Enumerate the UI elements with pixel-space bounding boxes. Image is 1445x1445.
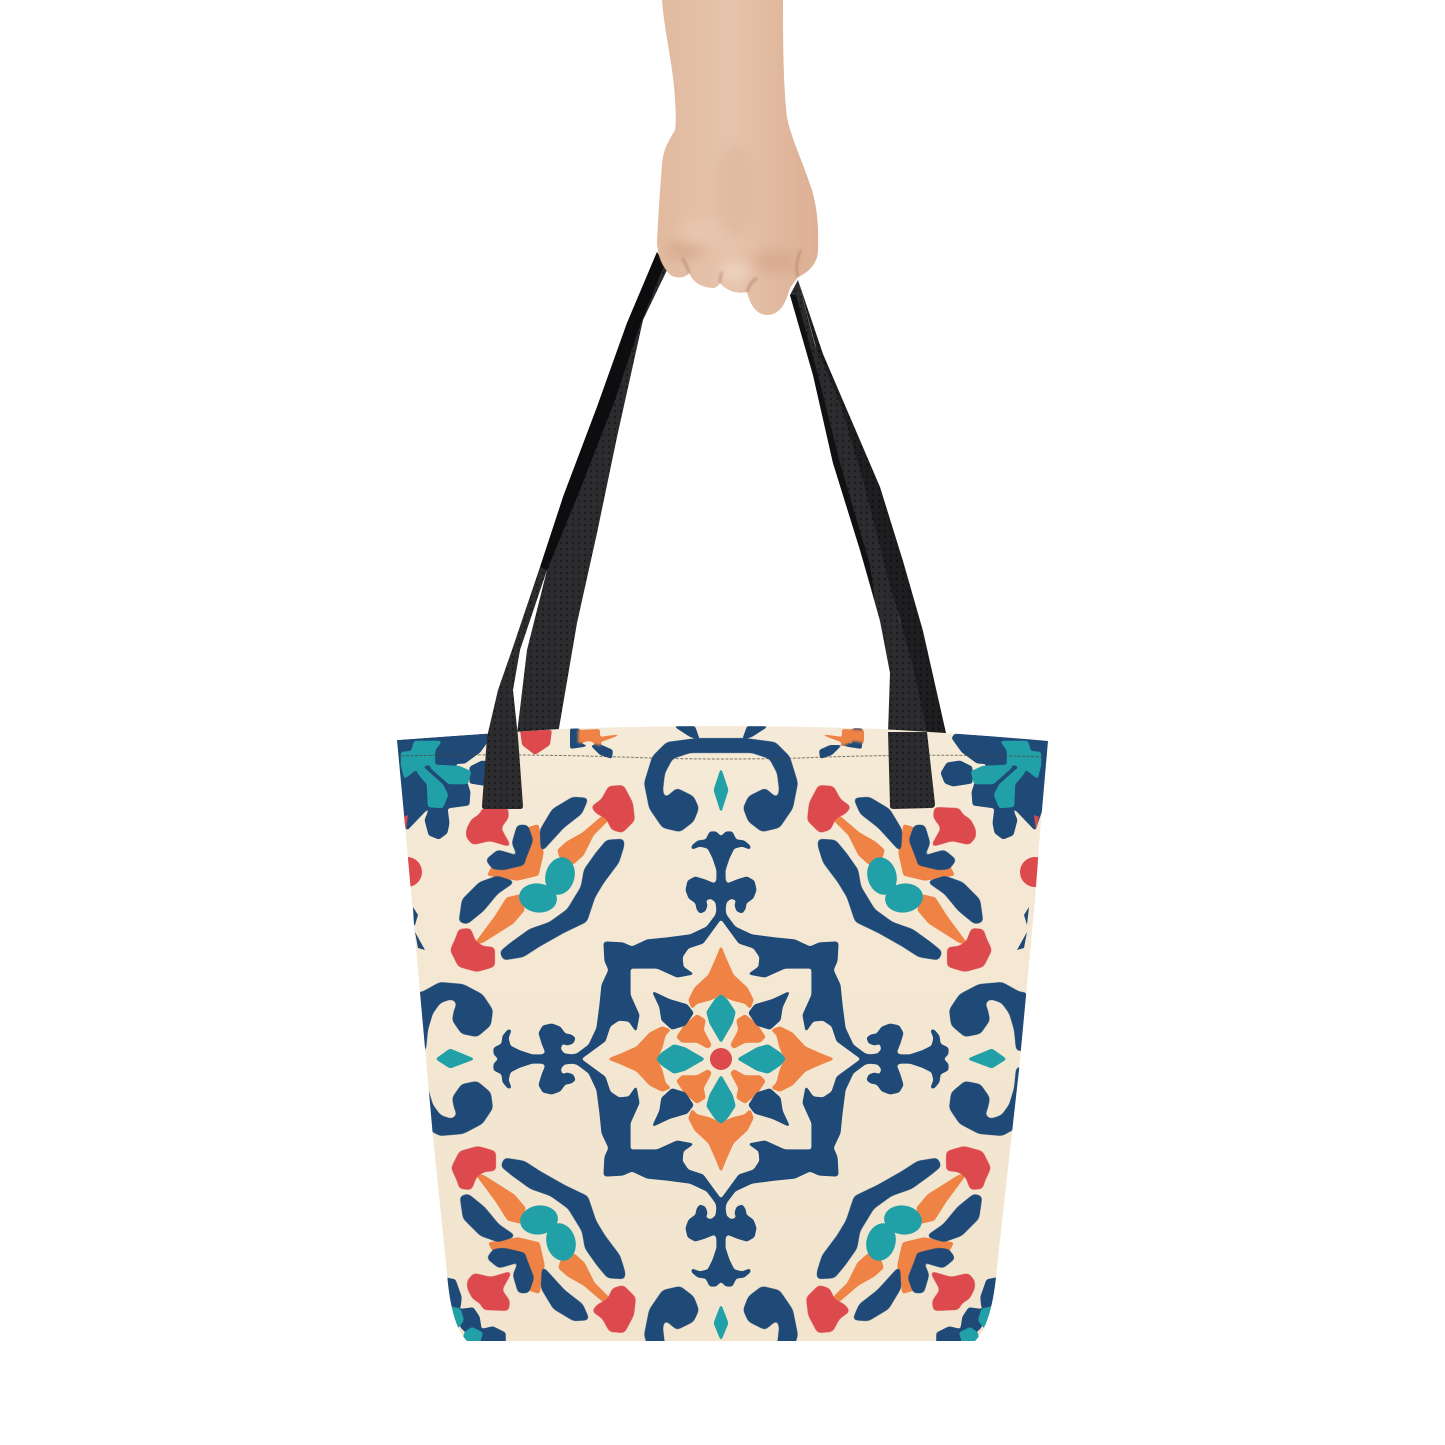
teal petals — [657, 995, 785, 1123]
bottom corner flower right — [937, 1278, 997, 1345]
right back strap — [798, 280, 946, 733]
hand and wrist — [657, 0, 818, 315]
central rosette — [609, 947, 833, 1171]
left strap dark fold — [540, 252, 663, 575]
orange large petals — [609, 947, 833, 1171]
left thin strap and patch — [482, 567, 547, 809]
corner motif top right — [808, 786, 991, 971]
finger creases — [682, 250, 801, 292]
knuckle highlights and shadows — [665, 145, 801, 292]
central navy star frame — [494, 832, 948, 1286]
bag body with printed pattern — [390, 720, 1055, 1379]
corner flower top right — [941, 734, 1050, 839]
orange small petals — [677, 1015, 765, 1103]
scroll pairs — [416, 739, 1026, 1379]
top seam stitching — [397, 755, 1047, 759]
teal diamonds — [436, 769, 1006, 1340]
right strap patch — [888, 732, 935, 809]
side fragments — [392, 815, 1050, 950]
navy inner leaves — [653, 992, 789, 1126]
red centre — [710, 1048, 732, 1070]
top edge fragments of the pattern — [478, 726, 864, 759]
right front strap — [790, 280, 927, 733]
corner motif top left — [451, 786, 634, 971]
hand shape — [657, 0, 818, 315]
bag fabric — [390, 720, 1055, 1350]
left wide strap — [517, 252, 668, 734]
corner motif bottom left — [452, 1147, 635, 1332]
front handle straps over the bag — [482, 567, 935, 809]
corner motif bottom right — [807, 1147, 990, 1332]
corner flower top left — [397, 734, 488, 840]
bottom corner flower left — [445, 1278, 505, 1345]
back handle straps behind the bag — [517, 252, 946, 734]
right strap dark fold — [790, 295, 875, 600]
